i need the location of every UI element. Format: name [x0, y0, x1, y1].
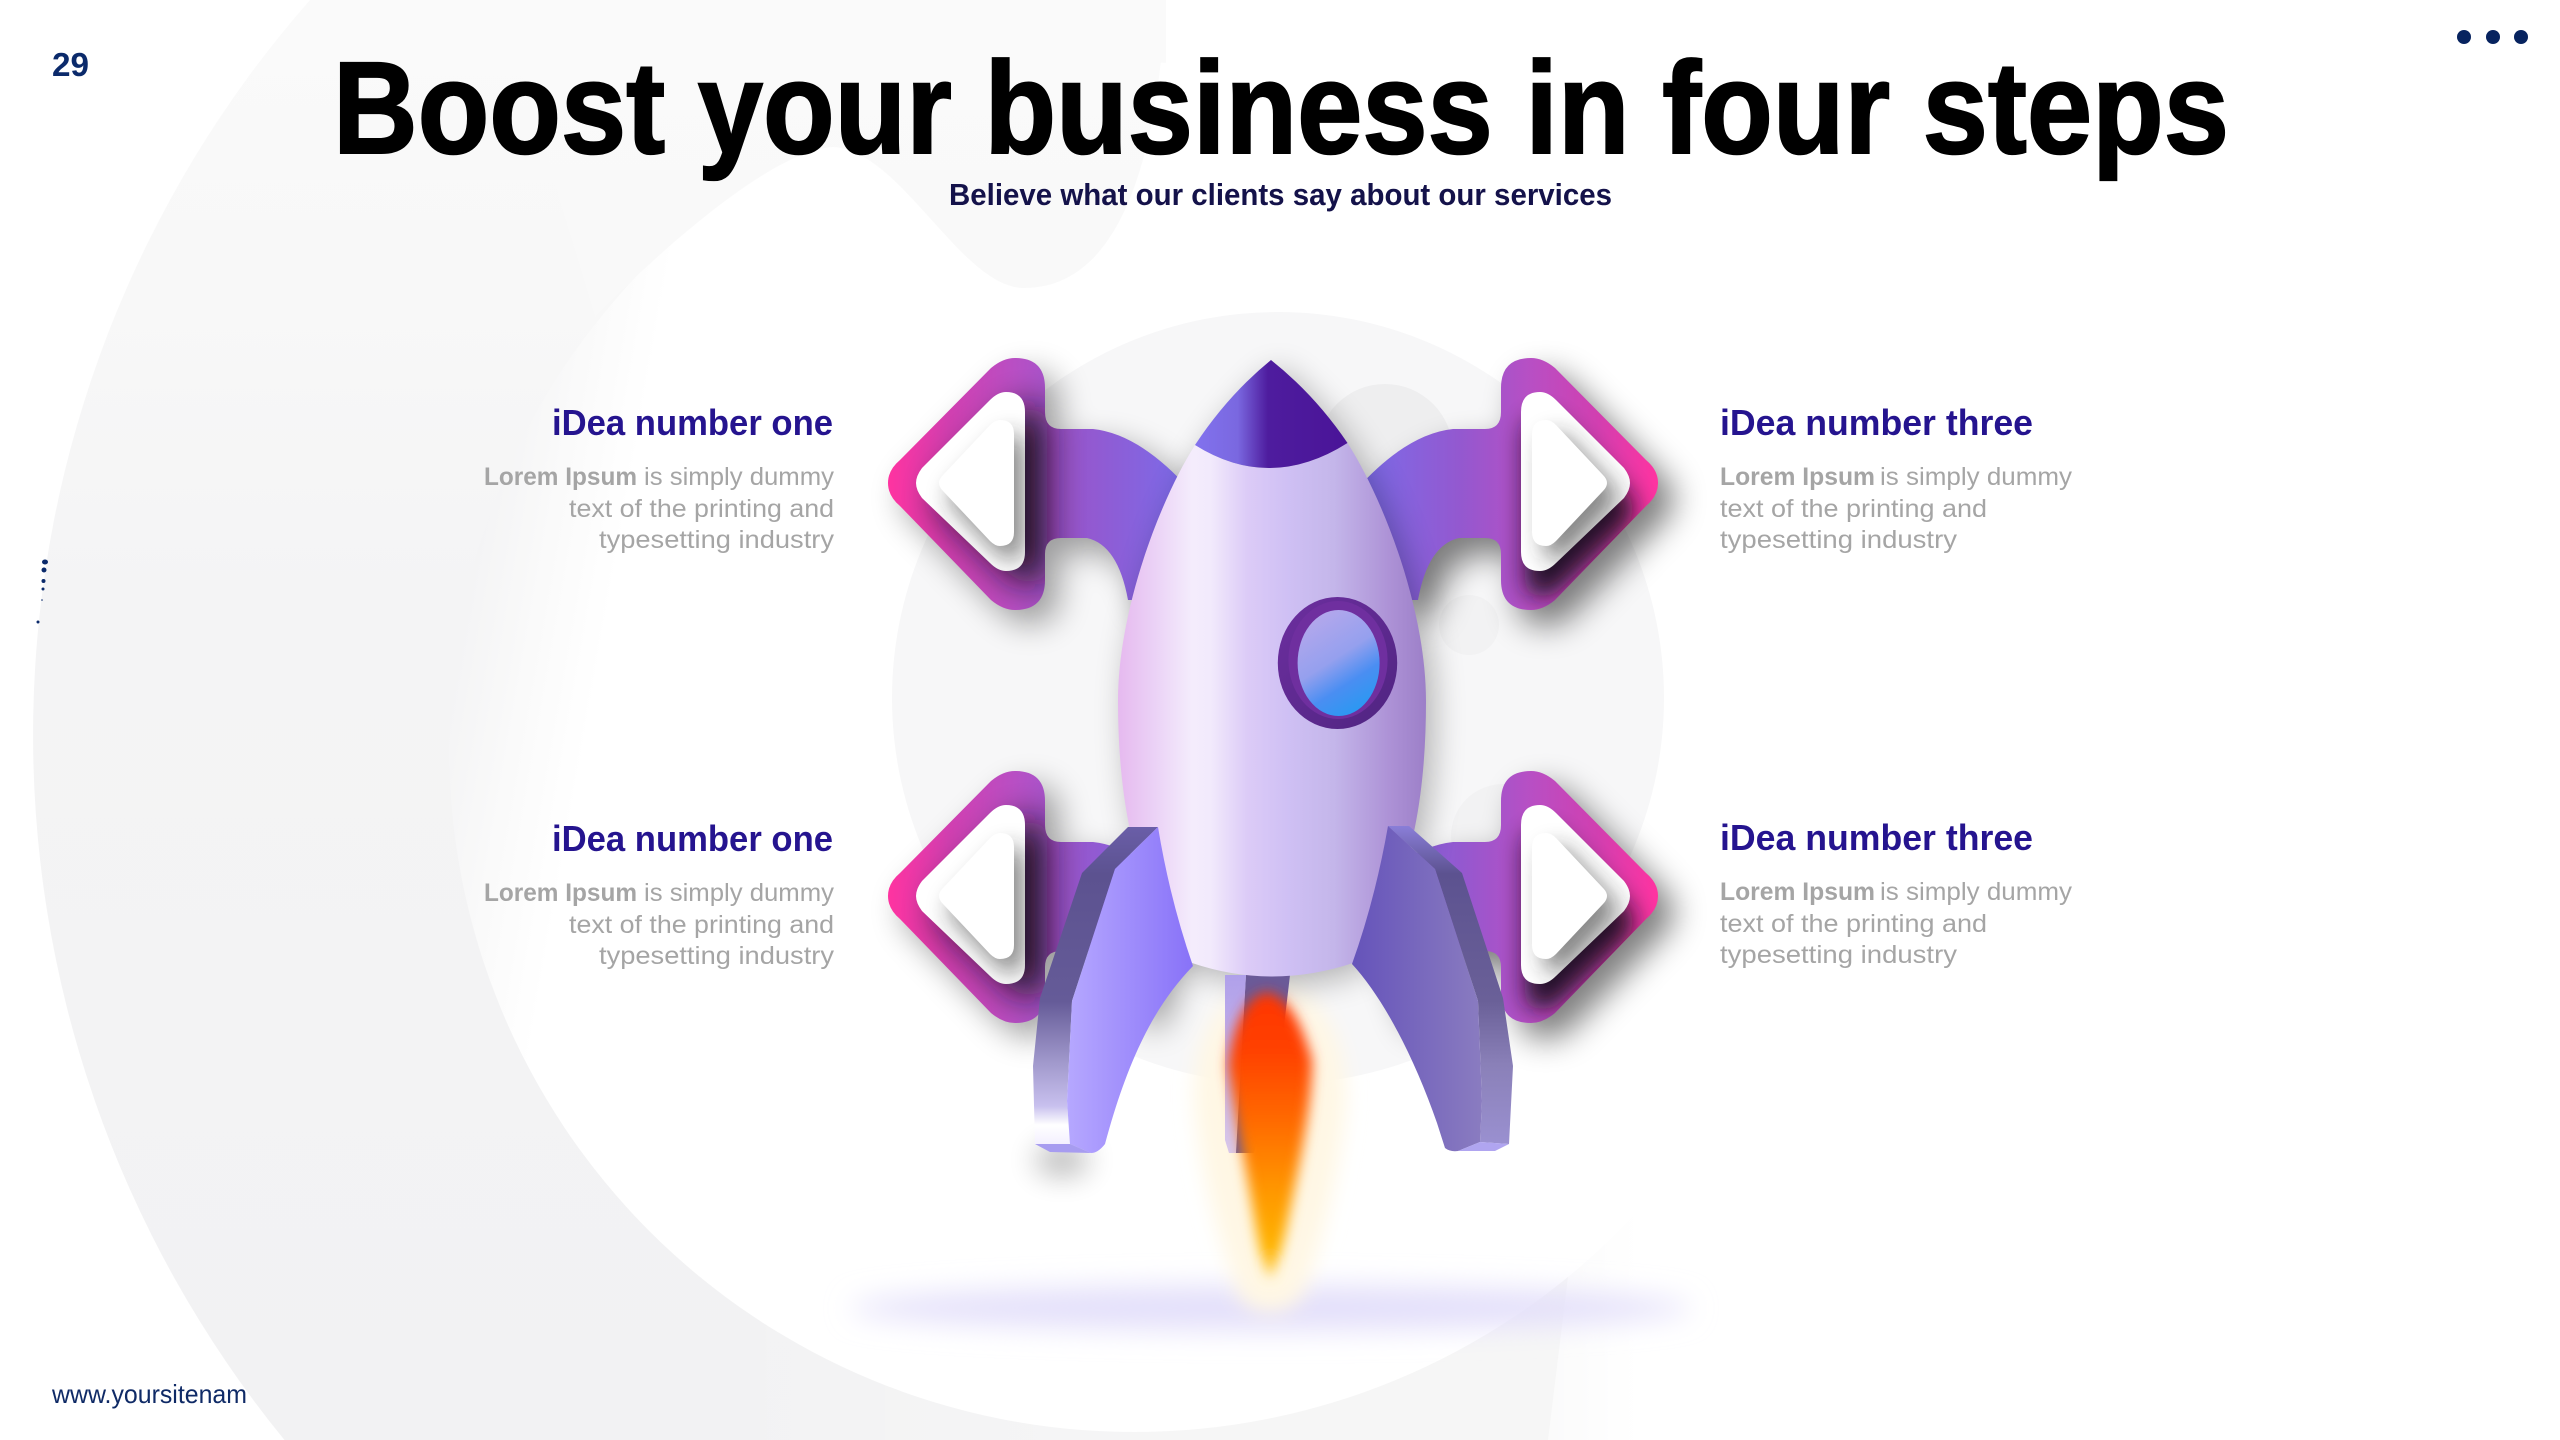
text block: lower left: [484, 818, 835, 970]
body: is simply dummy: [1880, 463, 2073, 491]
flame glow: [1194, 985, 1346, 1312]
right fin: [1352, 826, 1513, 1151]
body: [1720, 878, 2073, 969]
text block: upper left: [484, 402, 835, 554]
rocket body: [1118, 443, 1426, 976]
text block: upper right: [1720, 402, 2073, 554]
page number: 29: [52, 46, 89, 83]
website url: www.yoursitenam: [51, 1379, 247, 1409]
body: text of the printing and: [569, 495, 834, 523]
body: is simply dummy: [1880, 878, 2073, 906]
nozzle: [1225, 975, 1290, 1153]
body: [484, 463, 835, 554]
body: Lorem Ipsum: [1720, 463, 1875, 491]
body: text of the printing and: [1720, 910, 1987, 938]
subtitle: Believe what our clients say about our services: [949, 177, 1612, 212]
body: [1720, 463, 2073, 554]
body: text of the printing and: [569, 911, 834, 939]
arrow: lower right: [1356, 771, 1674, 1039]
body: is simply dummy: [644, 879, 835, 907]
text block: lower right: [1720, 817, 2073, 969]
arrow: upper left: [888, 358, 1204, 624]
body: [484, 879, 835, 970]
porthole window: [1278, 597, 1397, 729]
rocket: [1033, 360, 1513, 1278]
body: typesetting industry: [1720, 526, 1958, 554]
body: is simply dummy: [644, 463, 835, 491]
ground shadow: [851, 1286, 1691, 1330]
body: Lorem Ipsum: [484, 879, 637, 907]
moon circle behind rocket: [892, 312, 1664, 1084]
body: text of the printing and: [1720, 495, 1987, 523]
heading: iDea number one: [552, 402, 833, 443]
body: typesetting industry: [599, 526, 835, 554]
heading: iDea number one: [552, 818, 833, 859]
heading: iDea number three: [1720, 817, 2033, 858]
heading: iDea number three: [1720, 402, 2033, 443]
flame: [1228, 992, 1312, 1278]
body: typesetting industry: [1720, 941, 1958, 969]
arrow: lower left: [888, 771, 1204, 1037]
fin shadow: [1036, 1146, 1088, 1174]
clipped side text specks: [36, 560, 48, 624]
rocket nose cone: [1195, 360, 1348, 468]
body: Lorem Ipsum: [484, 463, 637, 491]
left fin: [1033, 827, 1193, 1153]
menu dots: [2457, 30, 2528, 44]
title: Boost your business in four steps: [333, 34, 2229, 181]
rocket soft shadow: [1126, 368, 1434, 984]
body: Lorem Ipsum: [1720, 878, 1875, 906]
arrow: upper right: [1356, 358, 1674, 626]
body: typesetting industry: [599, 942, 835, 970]
